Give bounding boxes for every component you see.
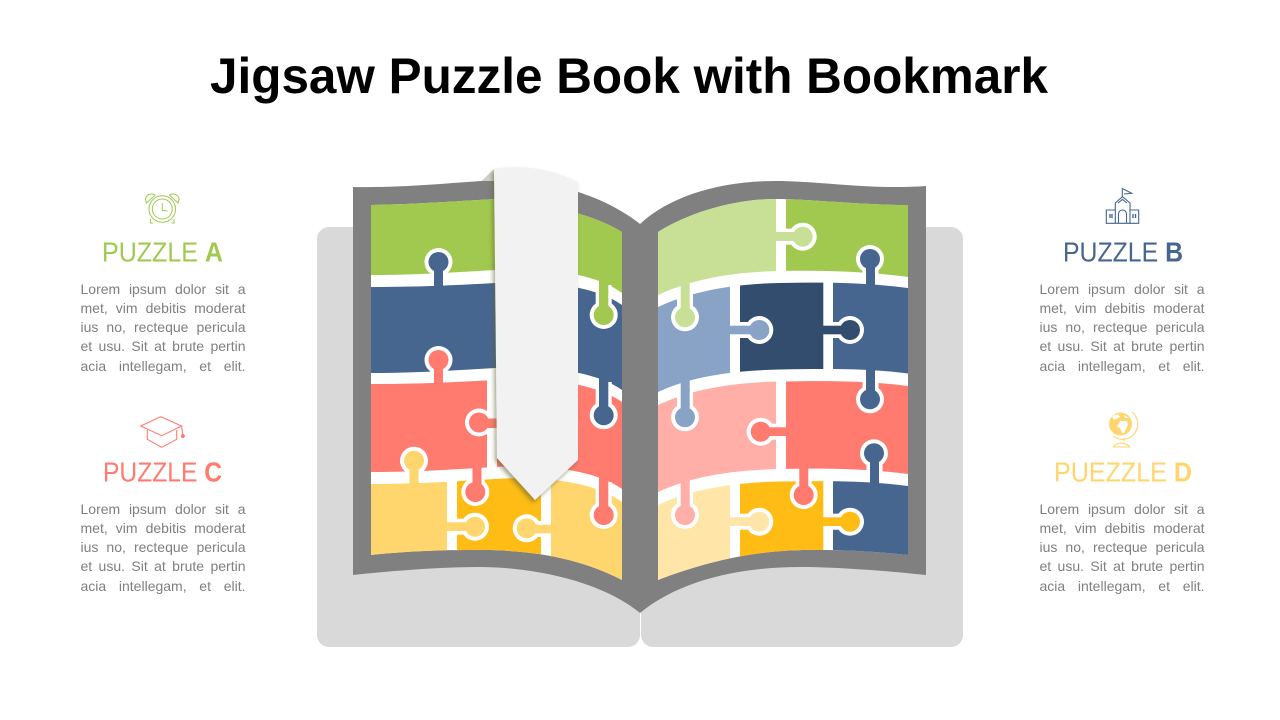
row: blue pieces [371,280,622,395]
icon: alarm clock [146,194,179,223]
row: light blue, dark blue and blue pieces [658,280,908,395]
heading: Puezzle D: PUEZZLE D [1054,456,1192,488]
text block: Puezzle D: ius no, recteque pericula [1040,539,1204,555]
bookmark [482,167,578,500]
open book illustration [317,167,963,647]
right page connector tabs [671,223,888,536]
text block: Puzzle B [1040,280,1204,374]
book back cover [317,227,963,647]
right page puzzle [658,199,908,580]
text block: Puzzle C: acia intellegam, et elit. [80,578,246,594]
title: Jigsaw Puzzle Book with Bookmark [210,48,1048,104]
heading: Puzzle C: PUZZLE C [103,456,222,488]
text block: Puezzle D: acia intellegam, et elit. [1040,578,1204,594]
book cover frame [353,180,926,613]
row: pale yellow, orange and blue pieces [658,481,908,580]
icon: school building [1106,188,1139,223]
text block: Puezzle D: et usu. Sit at brute pertin [1040,558,1204,574]
text block: Puzzle A: Lorem ipsum dolor sit a [80,280,246,296]
panel: Puzzle B [1040,188,1204,374]
panel: Puzzle C [80,416,246,594]
text block: Puezzle D: met, vim debitis moderat [1040,520,1204,536]
row: light green and green pieces [658,199,908,295]
row: red pieces [371,375,622,495]
text block: Puzzle C: et usu. Sit at brute pertin [80,558,246,574]
text block: Puzzle A [80,280,246,374]
text block: Puzzle B: met, vim debitis moderat [1040,300,1204,316]
text block: Puzzle B: et usu. Sit at brute pertin [1040,338,1204,354]
row: green pieces [371,199,622,293]
icon: globe [1109,412,1138,447]
heading: Puzzle B: PUZZLE B [1063,236,1183,268]
row: pink and red pieces [658,378,908,496]
panel: Puezzle D [1040,412,1204,594]
icon: graduation cap [141,417,184,447]
left page puzzle [365,190,630,590]
text block: Puzzle B: acia intellegam, et elit. [1040,358,1204,374]
text block: Puzzle A: met, vim debitis moderat [80,300,246,316]
row: yellow and orange pieces [371,478,622,580]
text block: Puzzle B: ius no, recteque pericula [1040,319,1204,335]
text block: Puezzle D [1040,500,1204,594]
left page connector tabs [400,248,618,542]
text block: Puzzle C: ius no, recteque pericula [80,539,246,555]
text block: Puezzle D: Lorem ipsum dolor sit a [1040,500,1204,516]
text block: Puzzle A: ius no, recteque pericula [80,319,246,335]
panel: Puzzle A [80,194,246,374]
text block: Puzzle C [80,500,246,594]
heading: Puzzle A: PUZZLE A [102,236,223,268]
text block: Puzzle C: met, vim debitis moderat [80,520,246,536]
text block: Puzzle C: Lorem ipsum dolor sit a [80,500,246,516]
text block: Puzzle B: Lorem ipsum dolor sit a [1040,280,1204,296]
text block: Puzzle A: acia intellegam, et elit. [80,358,246,374]
text block: Puzzle A: et usu. Sit at brute pertin [80,338,246,354]
